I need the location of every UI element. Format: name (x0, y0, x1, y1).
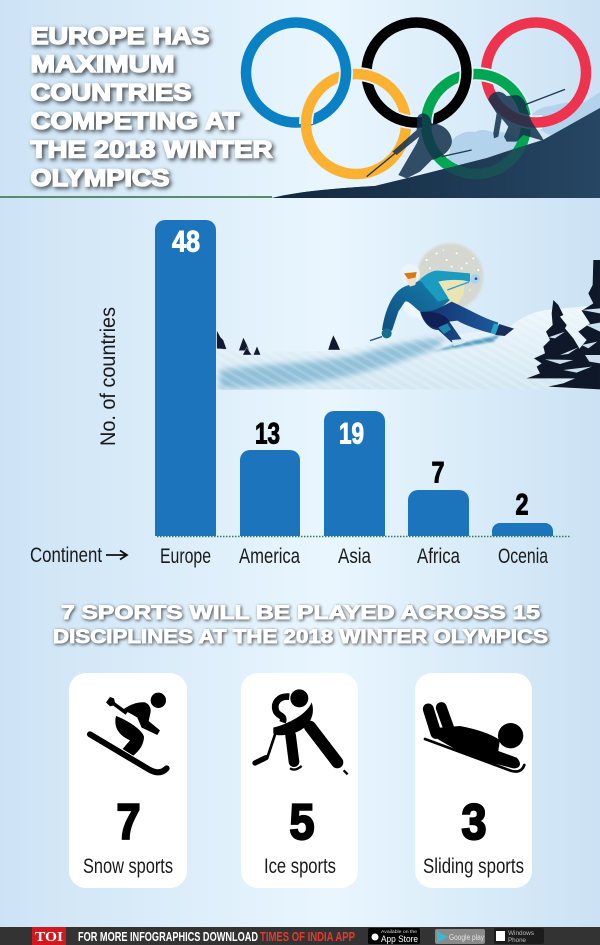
badge: google play (435, 929, 485, 944)
footer bar (0, 927, 600, 945)
title: COMPETING AT (30, 108, 240, 135)
bar: Africa: 7 (432, 456, 444, 490)
header mountain base (272, 108, 600, 198)
ring interlace: red over green (518, 112, 542, 130)
silhouette: left skier (367, 114, 472, 178)
badge: google play: Google play (449, 933, 484, 942)
badge: app store: App Store (381, 934, 418, 944)
bar: Europe: 48 (172, 226, 200, 258)
ring: red (486, 22, 586, 122)
x axis labels: Ocenia (498, 545, 548, 568)
badge: windows phone: Windows (508, 930, 535, 937)
bar: America (240, 418, 300, 536)
section heading: DISCIPLINES AT THE 2018 WINTER OLYMPICS (53, 627, 548, 648)
label: sliding sports: Sliding sports (423, 855, 524, 878)
ring: blue (246, 22, 346, 122)
title: EUROPE HAS (30, 23, 210, 50)
panel: sliding sports (415, 673, 532, 888)
slope (217, 305, 600, 389)
title (30, 23, 272, 192)
ring: green (426, 74, 526, 174)
footer text: FOR MORE INFOGRAPHICS DOWNLOAD (78, 929, 258, 944)
ring interlace: black over green (455, 58, 474, 92)
badge: app store: Available on the (381, 929, 418, 934)
bar: Ocenia (492, 488, 553, 536)
panel: snow sports (69, 673, 187, 888)
footer text: app name: TIMES OF INDIA APP (260, 929, 355, 944)
x axis labels: Asia (338, 545, 371, 568)
badge: app store (368, 928, 420, 944)
olympic rings (246, 22, 586, 174)
value: 5: 5 (290, 794, 314, 850)
header skier silhouettes (367, 89, 565, 178)
section heading (53, 603, 548, 648)
section heading: 7 SPORTS WILL BE PLAYED ACROSS 15 (61, 603, 541, 624)
x axis labels: Continent (30, 544, 102, 567)
bar: America: 13 (255, 418, 280, 450)
chart scene: skier on slope (217, 243, 600, 389)
y axis label: No. of countries (97, 307, 120, 446)
large trees (527, 260, 600, 389)
label: snow sports: Snow sports (83, 855, 173, 878)
arrow: continent (106, 550, 127, 560)
bar: Ocenia: 2 (516, 488, 528, 522)
icon: hockey player (255, 689, 348, 774)
skier (370, 243, 514, 346)
glow behind skier (395, 243, 483, 320)
small trees (217, 330, 340, 355)
x axis labels (30, 544, 548, 568)
badge: windows phone (494, 928, 544, 944)
header snow clouds (445, 92, 600, 175)
bar: Europe (155, 220, 216, 536)
bar: Asia (324, 411, 385, 536)
bar: Africa (408, 456, 469, 536)
ring: black (366, 22, 466, 122)
x axis labels: America (239, 545, 300, 568)
label: ice sports: Ice sports (264, 855, 336, 878)
icon: skier (90, 693, 167, 772)
title: MAXIMUM (30, 51, 174, 78)
value: 7: 7 (116, 794, 140, 850)
ring interlace: black over yellow (392, 110, 422, 130)
silhouette: right skier (488, 89, 565, 142)
bar chart (155, 220, 553, 536)
panel: ice sports (241, 673, 358, 888)
logo: TOI: TOI (35, 930, 63, 945)
header mountain tint over rings (272, 108, 600, 198)
x axis labels: Africa (417, 545, 460, 568)
divider line under header (0, 196, 272, 198)
value: 3: 3 (462, 794, 486, 850)
badge: windows phone: Phone (508, 937, 526, 944)
title: THE 2018 WINTER (30, 136, 272, 164)
bar: Asia: 19 (339, 418, 364, 450)
x axis labels: Europe (160, 545, 211, 568)
title: COUNTRIES (30, 80, 191, 106)
ring: yellow (306, 74, 406, 174)
icon: luge (425, 708, 524, 771)
title: OLYMPICS (30, 165, 170, 192)
logo: TOI (32, 927, 66, 945)
ring interlace: blue over yellow (336, 58, 353, 92)
